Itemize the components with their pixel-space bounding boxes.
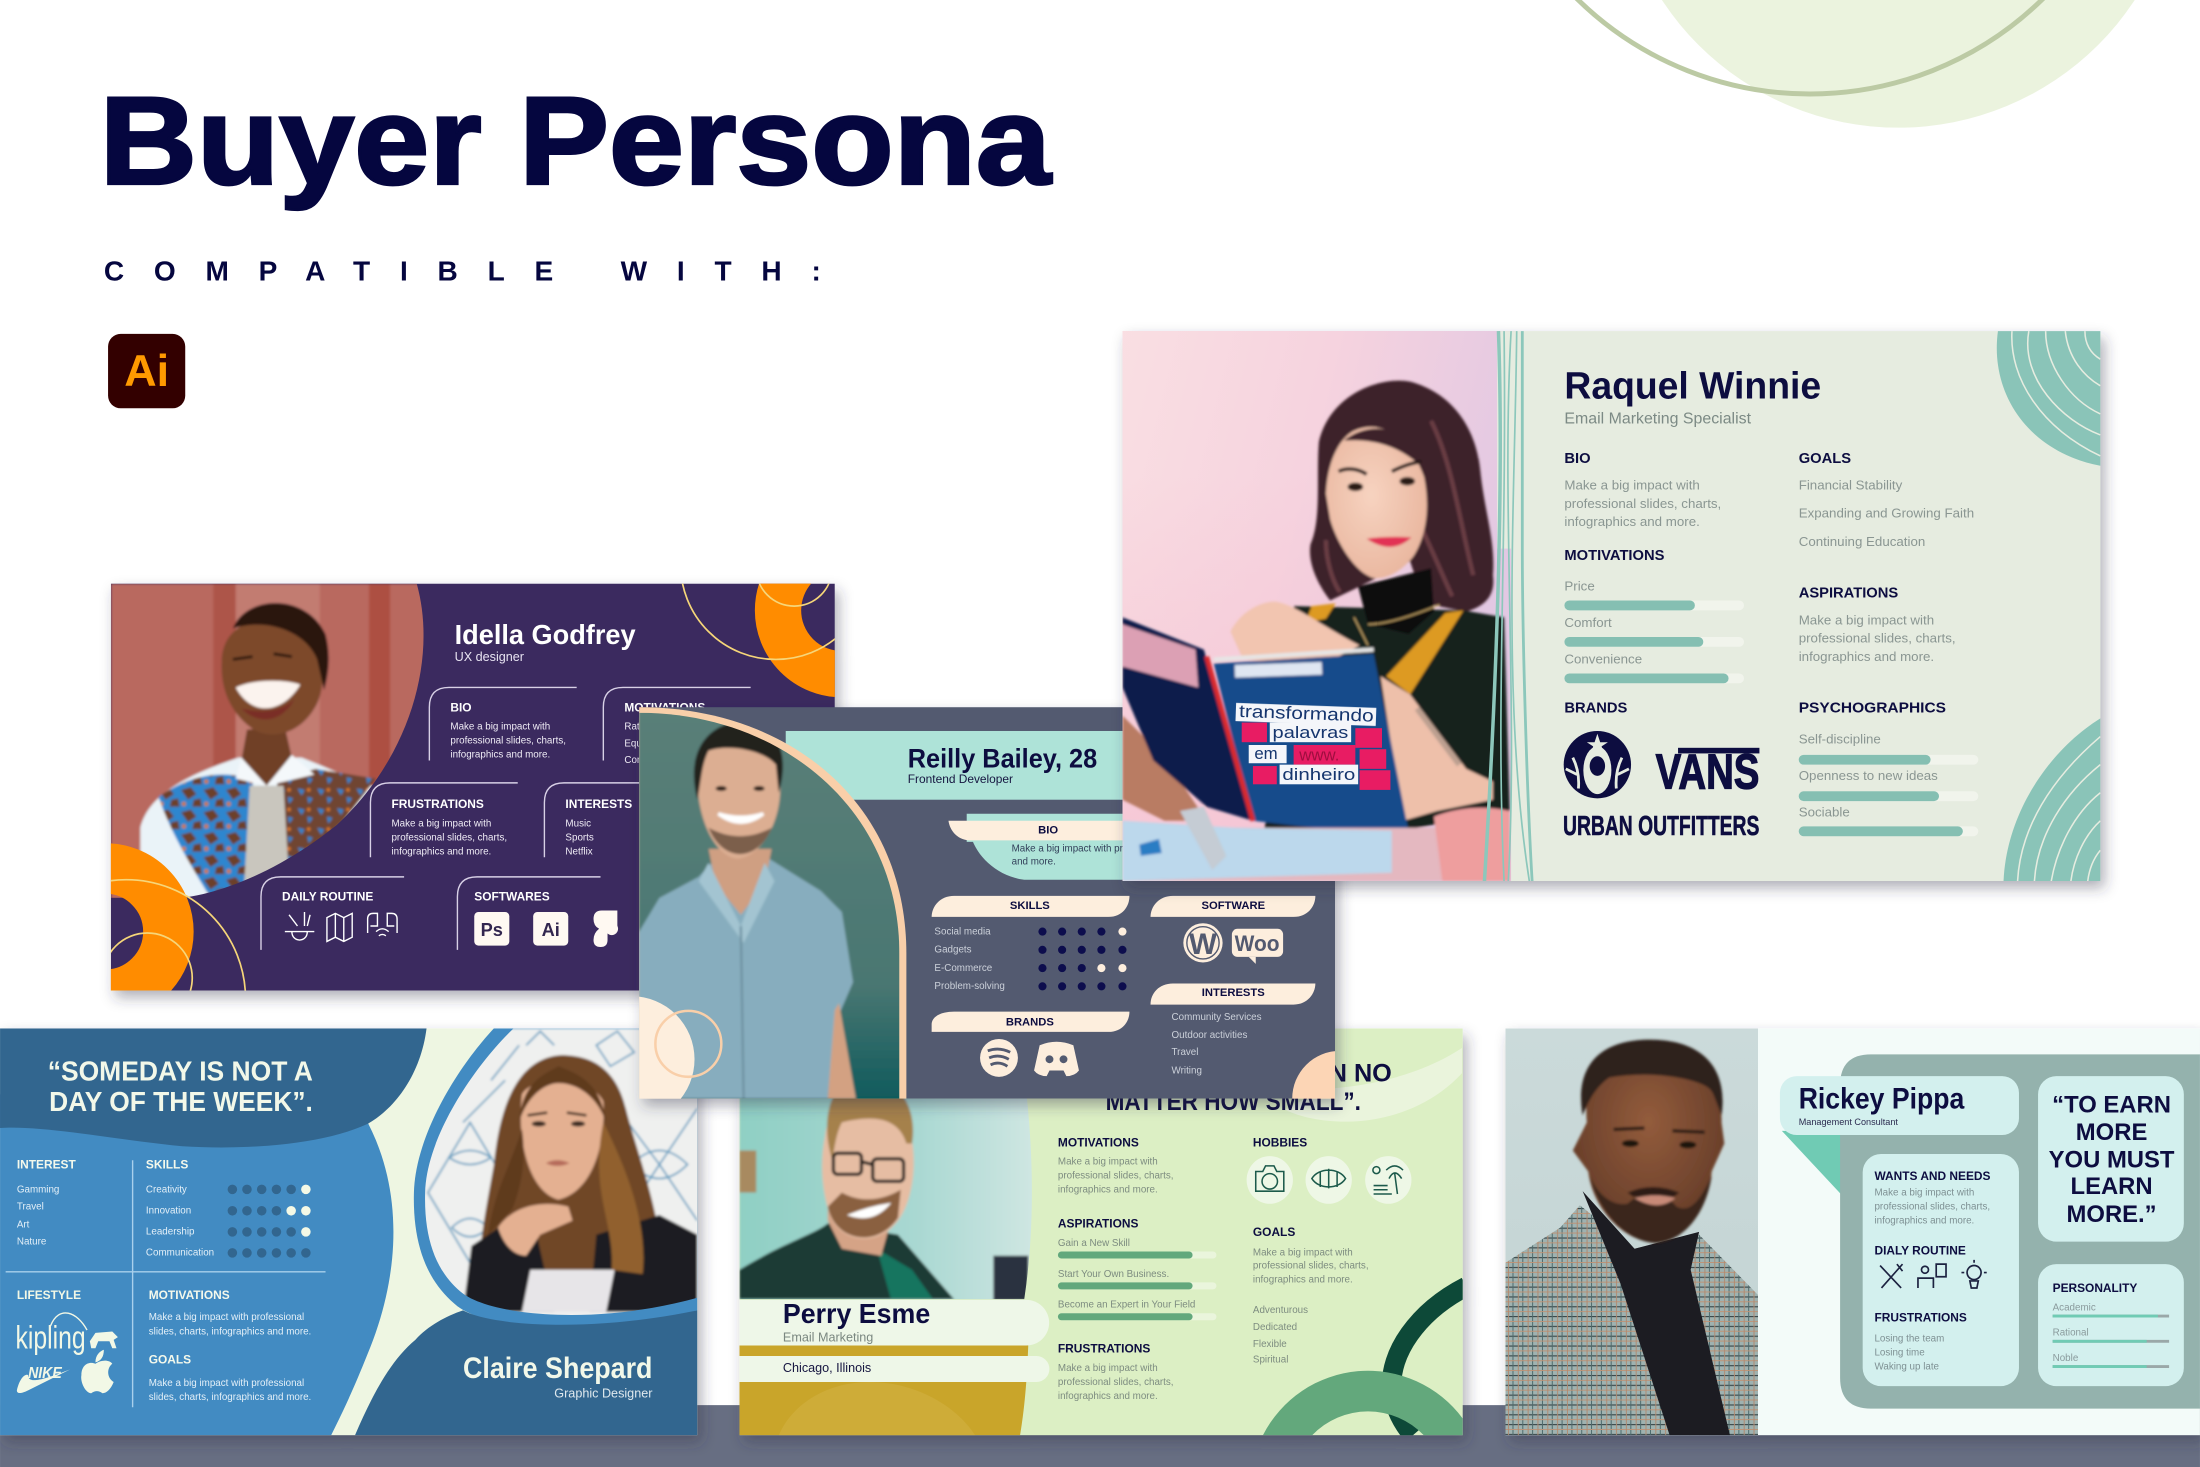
section: interest — [17, 1158, 76, 1247]
name: Claire Shepard: Claire Shepard — [463, 1352, 652, 1385]
section: aspirations: Make a big impact with — [1799, 612, 1934, 627]
quote box: MORE — [2076, 1119, 2147, 1146]
section: goals: GOALS — [1799, 451, 1851, 467]
section: bio: Make a big impact with — [450, 722, 550, 733]
section: lifestyle logos: LIFESTYLE — [17, 1288, 81, 1302]
photo: Rickey — [1505, 1028, 1758, 1435]
section: frustrations: FRUSTRATIONS — [1058, 1342, 1150, 1356]
section: interests: Netflix — [565, 846, 593, 857]
section: skills — [146, 1158, 311, 1259]
section: interests: Music — [565, 818, 591, 829]
section: interest: Art — [17, 1220, 30, 1231]
section: motivations: Make a big impact with — [1058, 1157, 1158, 1168]
photo: Idella — [111, 584, 448, 906]
section: bio: infographics and more. — [450, 750, 550, 761]
name box — [1780, 1076, 2019, 1135]
section: bio: BIO — [450, 700, 472, 714]
section: interests: Writing — [1172, 1065, 1202, 1076]
mustard background — [739, 1340, 1028, 1435]
box: wants, routine, frustrations: infographics and more. — [1874, 1215, 1974, 1226]
section: daily routine — [282, 890, 397, 941]
quote box: “TO EARN — [2052, 1092, 2171, 1119]
section: bio: professional slides, charts, — [1564, 496, 1721, 511]
photo: Raquel reading a book — [1122, 331, 1515, 881]
icon: Adobe Illustrator: Ai — [124, 345, 169, 396]
section: skills: SKILLS — [1010, 900, 1050, 912]
box: wants, routine, frustrations: WANTS AND NEEDS — [1874, 1169, 1991, 1183]
section: goals: Financial Stability — [1799, 478, 1903, 493]
section: interest: Nature — [17, 1236, 47, 1247]
section: interests — [565, 797, 632, 857]
section: lifestyle logos: NIKE — [28, 1365, 62, 1382]
quote box — [2038, 1076, 2184, 1242]
section: brands logos — [1563, 701, 1759, 841]
panel: Perry Esme persona card — [739, 1028, 1466, 1435]
box: wants, routine, frustrations: FRUSTRATIONS — [1874, 1311, 1967, 1325]
section: interest: Gamming — [17, 1185, 59, 1196]
name box: Rickey Pippa — [1799, 1082, 1965, 1115]
section: bio: infographics and more. — [1564, 514, 1700, 529]
section: motivations: Equality — [624, 738, 659, 749]
photo frame — [414, 1028, 697, 1330]
book text: www. — [1298, 745, 1339, 764]
section: motivations: MOTIVATIONS — [149, 1288, 230, 1302]
name: Perry Esme: Perry Esme — [783, 1298, 930, 1329]
box: personality: Academic — [2053, 1302, 2096, 1313]
section: goals: infographics and more. — [1253, 1274, 1353, 1285]
name background — [355, 1310, 697, 1435]
section: aspirations with bars: ASPIRATIONS — [1058, 1217, 1138, 1231]
role: Email Marketing — [783, 1330, 873, 1344]
name: Reilly Bailey: Reilly Bailey, 28 — [908, 743, 1097, 773]
section: software — [1151, 896, 1315, 964]
box: personality: Noble — [2053, 1353, 2079, 1364]
photo: Reilly — [638, 709, 905, 1101]
box: wants, routine, frustrations — [1863, 1154, 2019, 1386]
quote box: MORE.” — [2067, 1201, 2157, 1228]
section: motivations: MOTIVATIONS — [1058, 1135, 1139, 1149]
location: Chicago, Illinois — [783, 1361, 871, 1375]
decor: orange rings — [110, 584, 835, 990]
section: bio: Make a big impact with professional — [1012, 844, 1167, 855]
section: bio — [450, 700, 566, 761]
section: skills: Innovation — [146, 1206, 191, 1217]
section: frustrations — [1058, 1342, 1174, 1402]
photo: Perry — [740, 1098, 1032, 1300]
section: frustrations: professional slides, charts, — [391, 832, 507, 843]
box: wants, routine, frustrations: Make a big impact with — [1874, 1187, 1974, 1198]
quote: DAY OF THE WEEK”. — [49, 1086, 313, 1117]
section: bio: Make a big impact with — [1564, 478, 1700, 493]
section: frustrations: Make a big impact with — [391, 818, 491, 829]
quote background — [0, 1028, 427, 1147]
box: wants, routine, frustrations: Losing the team — [1874, 1333, 1944, 1344]
section: goals: Adventurous — [1253, 1305, 1308, 1316]
section: goals: Spiritual — [1253, 1354, 1288, 1365]
section: motivations: professional slides, charts, — [1058, 1171, 1174, 1182]
section: motivations — [149, 1288, 311, 1337]
box: personality: Rational — [2053, 1328, 2089, 1339]
section: aspirations — [1799, 586, 1956, 664]
section: skills: Leadership — [146, 1227, 195, 1238]
section: daily routine: DAILY ROUTINE — [282, 890, 373, 904]
quote box: LEARN — [2071, 1173, 2153, 1200]
section: psychographics with bars: PSYCHOGRAPHICS — [1799, 701, 1946, 717]
info panel background — [1497, 331, 2100, 881]
section: software: SOFTWARE — [1201, 900, 1266, 912]
section: interests: Sports — [565, 832, 594, 843]
section: motivations with bars — [1564, 548, 1744, 683]
section: motivations: MOTIVATIONS — [624, 700, 705, 714]
box: wants, routine, frustrations: DIALY ROUTINE — [1874, 1243, 1966, 1257]
section: goals: Dedicated — [1253, 1322, 1297, 1333]
section: goals — [1799, 451, 1974, 549]
peach corner circle — [1292, 1051, 1388, 1146]
ring — [655, 1011, 721, 1077]
section: softwares: Ai — [542, 919, 560, 940]
section: interest: Travel — [17, 1201, 44, 1212]
title: Buyer Persona — [100, 72, 1053, 211]
section: goals: Make a big impact with professional — [149, 1378, 304, 1389]
section: skills: SKILLS — [146, 1158, 188, 1172]
box: wants, routine, frustrations: professional slides, charts, — [1874, 1201, 1990, 1212]
section: motivations — [1058, 1135, 1174, 1196]
section: motivations: Rational — [624, 722, 660, 733]
section: bio: and more. — [1012, 856, 1056, 867]
section: aspirations with bars: Become an Expert in Your Field — [1058, 1300, 1195, 1311]
box: wants, routine, frustrations: Losing time — [1874, 1347, 1925, 1358]
section: bio: professional slides, charts, — [450, 736, 566, 747]
book text — [1235, 701, 1390, 790]
section: lifestyle logos — [15, 1288, 118, 1393]
section: aspirations: infographics and more. — [1799, 649, 1934, 664]
mint name band — [786, 731, 1151, 800]
decor: teal wavy lines — [1484, 331, 1532, 881]
section: hobbies icons — [1247, 1135, 1411, 1204]
decor: bottom-right teal leaf — [2004, 718, 2100, 881]
section: goals — [1253, 1225, 1369, 1365]
section: brands logos: URBAN OUTFITTERS — [1563, 810, 1759, 841]
section: goals: slides, charts, infographics and more. — [149, 1392, 311, 1403]
section: interests: INTERESTS — [565, 797, 632, 811]
section: interests: INTERESTS — [1202, 987, 1265, 999]
section: skills: Gadgets — [934, 945, 972, 956]
section: motivations with bars: Comfort — [1564, 615, 1612, 630]
section: aspirations with bars — [1058, 1217, 1216, 1320]
section: skills — [932, 896, 1129, 992]
section: goals — [149, 1353, 311, 1403]
book text: palavras — [1273, 723, 1348, 742]
blue info panel — [0, 1094, 393, 1435]
role: Frontend Developer — [908, 772, 1013, 786]
section: skills: Creativity — [146, 1185, 187, 1196]
box: personality: PERSONALITY — [2053, 1281, 2137, 1295]
box: personality — [2038, 1264, 2184, 1386]
panel: Idella Godfrey persona card — [106, 582, 848, 1006]
section: psychographics with bars: Openness to new ideas — [1799, 768, 1938, 783]
section frames — [261, 687, 751, 950]
section: frustrations: professional slides, charts, — [1058, 1377, 1174, 1388]
section: frustrations: Make a big impact with — [1058, 1363, 1158, 1374]
section: bio — [948, 814, 1167, 880]
icons: daily routine — [1880, 1260, 1987, 1288]
role: Email Marketing Specialist — [1564, 410, 1752, 428]
section: skills: E-Commerce — [934, 963, 993, 974]
section: brands logos: VANS — [1656, 745, 1759, 799]
quote — [50, 1061, 312, 1112]
subtitle: COMPATIBLE WITH: — [104, 256, 821, 287]
section: psychographics with bars: Sociable — [1799, 805, 1850, 820]
section: interest: INTEREST — [17, 1158, 76, 1172]
quote: MATTER HOW SMALL”. — [1106, 1088, 1361, 1116]
section: interests: Travel — [1172, 1047, 1198, 1058]
decor: top-right teal leaf — [1997, 331, 2100, 466]
section: motivations: infographics and more. — [1058, 1185, 1158, 1196]
section: skills: Social media — [934, 926, 991, 937]
panel: Rickey Pippa persona card — [1505, 1028, 2200, 1435]
bottom-left cream circle — [568, 996, 695, 1122]
name box: Management Consultant — [1799, 1117, 1898, 1127]
name: Idella Godfrey: Idella Godfrey — [455, 619, 636, 650]
section: softwares — [474, 890, 618, 947]
section: motivations with bars: Convenience — [1564, 652, 1642, 667]
section: motivations with bars: MOTIVATIONS — [1564, 548, 1665, 564]
section: interests — [1151, 984, 1315, 1076]
section: frustrations: infographics and more. — [1058, 1391, 1158, 1402]
bottom grey band — [0, 1405, 2200, 1467]
box: wants, routine, frustrations: Waking up late — [1874, 1361, 1940, 1372]
section: goals: GOALS — [149, 1353, 191, 1367]
section: psychographics with bars: Self-discipline — [1799, 732, 1881, 747]
section: frustrations: infographics and more. — [391, 846, 491, 857]
section: goals: Continuing Education — [1799, 534, 1925, 549]
dividers — [6, 1160, 326, 1407]
section: aspirations: ASPIRATIONS — [1799, 586, 1898, 602]
section: aspirations: professional slides, charts, — [1799, 631, 1956, 646]
section: software: W — [1189, 928, 1217, 961]
quote — [1107, 1064, 1391, 1110]
photo: Claire — [425, 1028, 698, 1315]
section: motivations: Make a big impact with professional — [149, 1312, 304, 1323]
section: motivations with bars: Price — [1564, 579, 1595, 594]
decorative pale circle — [1616, 0, 2181, 128]
section: motivations: Comfort — [624, 755, 660, 766]
section: aspirations with bars: Gain a New Skill — [1058, 1238, 1130, 1249]
section: bio — [1564, 451, 1721, 529]
section: frustrations: FRUSTRATIONS — [391, 797, 484, 811]
book text: dinheiro — [1282, 765, 1355, 784]
panel: Raquel Winnie persona card — [1122, 331, 2100, 881]
section: aspirations with bars: Start Your Own Business. — [1058, 1269, 1169, 1280]
section: softwares: Ps — [481, 919, 503, 940]
section: hobbies icons: HOBBIES — [1253, 1135, 1307, 1149]
decorative ring — [1477, 0, 2142, 94]
icon: Adobe Illustrator — [108, 334, 185, 408]
section: skills: Problem-solving — [934, 981, 1005, 992]
role: UX designer — [455, 650, 524, 664]
section: goals: GOALS — [1253, 1225, 1295, 1239]
quote box: YOU MUST — [2049, 1146, 2175, 1173]
section: goals: Make a big impact with — [1253, 1248, 1353, 1259]
section: bio: BIO — [1038, 824, 1058, 836]
section: psychographics with bars — [1799, 701, 1978, 836]
section: lifestyle logos: kipling — [15, 1319, 86, 1355]
section: motivations — [624, 700, 705, 766]
section: software: Woo — [1235, 931, 1280, 956]
section: goals: Flexible — [1253, 1339, 1287, 1350]
panel: Claire Shepard persona card — [0, 1028, 702, 1435]
section: brands logos: BRANDS — [1564, 701, 1628, 717]
section: interests: Outdoor activities — [1172, 1030, 1247, 1041]
section: brands: BRANDS — [1006, 1017, 1054, 1029]
quote: “TAKE ACTION NO — [1165, 1060, 1392, 1088]
peach arch — [639, 707, 906, 1099]
role: Graphic Designer — [554, 1386, 652, 1400]
section: bio: BIO — [1564, 451, 1591, 467]
crescent decoration — [1285, 1048, 1462, 1122]
decor: green arcs — [1263, 1287, 1466, 1435]
section: goals: Expanding and Growing Faith — [1799, 506, 1974, 521]
section: skills: Communication — [146, 1248, 214, 1259]
section: brands — [932, 1012, 1129, 1077]
section: softwares: SOFTWARES — [474, 890, 550, 904]
grey-green panel — [1840, 1054, 2200, 1409]
name: Raquel Winnie: Raquel Winnie — [1564, 365, 1821, 407]
quote: “SOMEDAY IS NOT A — [48, 1055, 313, 1086]
section: motivations: slides, charts, infographics and more. — [149, 1326, 311, 1337]
panel: Reilly Bailey persona card — [568, 707, 1388, 1146]
name and location pills — [739, 1300, 1049, 1382]
book text: transformando — [1239, 701, 1374, 726]
section: interests: Community Services — [1172, 1012, 1262, 1023]
teal triangle — [1782, 1131, 1841, 1194]
book text: em — [1254, 744, 1278, 763]
section: goals: professional slides, charts, — [1253, 1260, 1369, 1271]
section: frustrations — [391, 797, 507, 857]
